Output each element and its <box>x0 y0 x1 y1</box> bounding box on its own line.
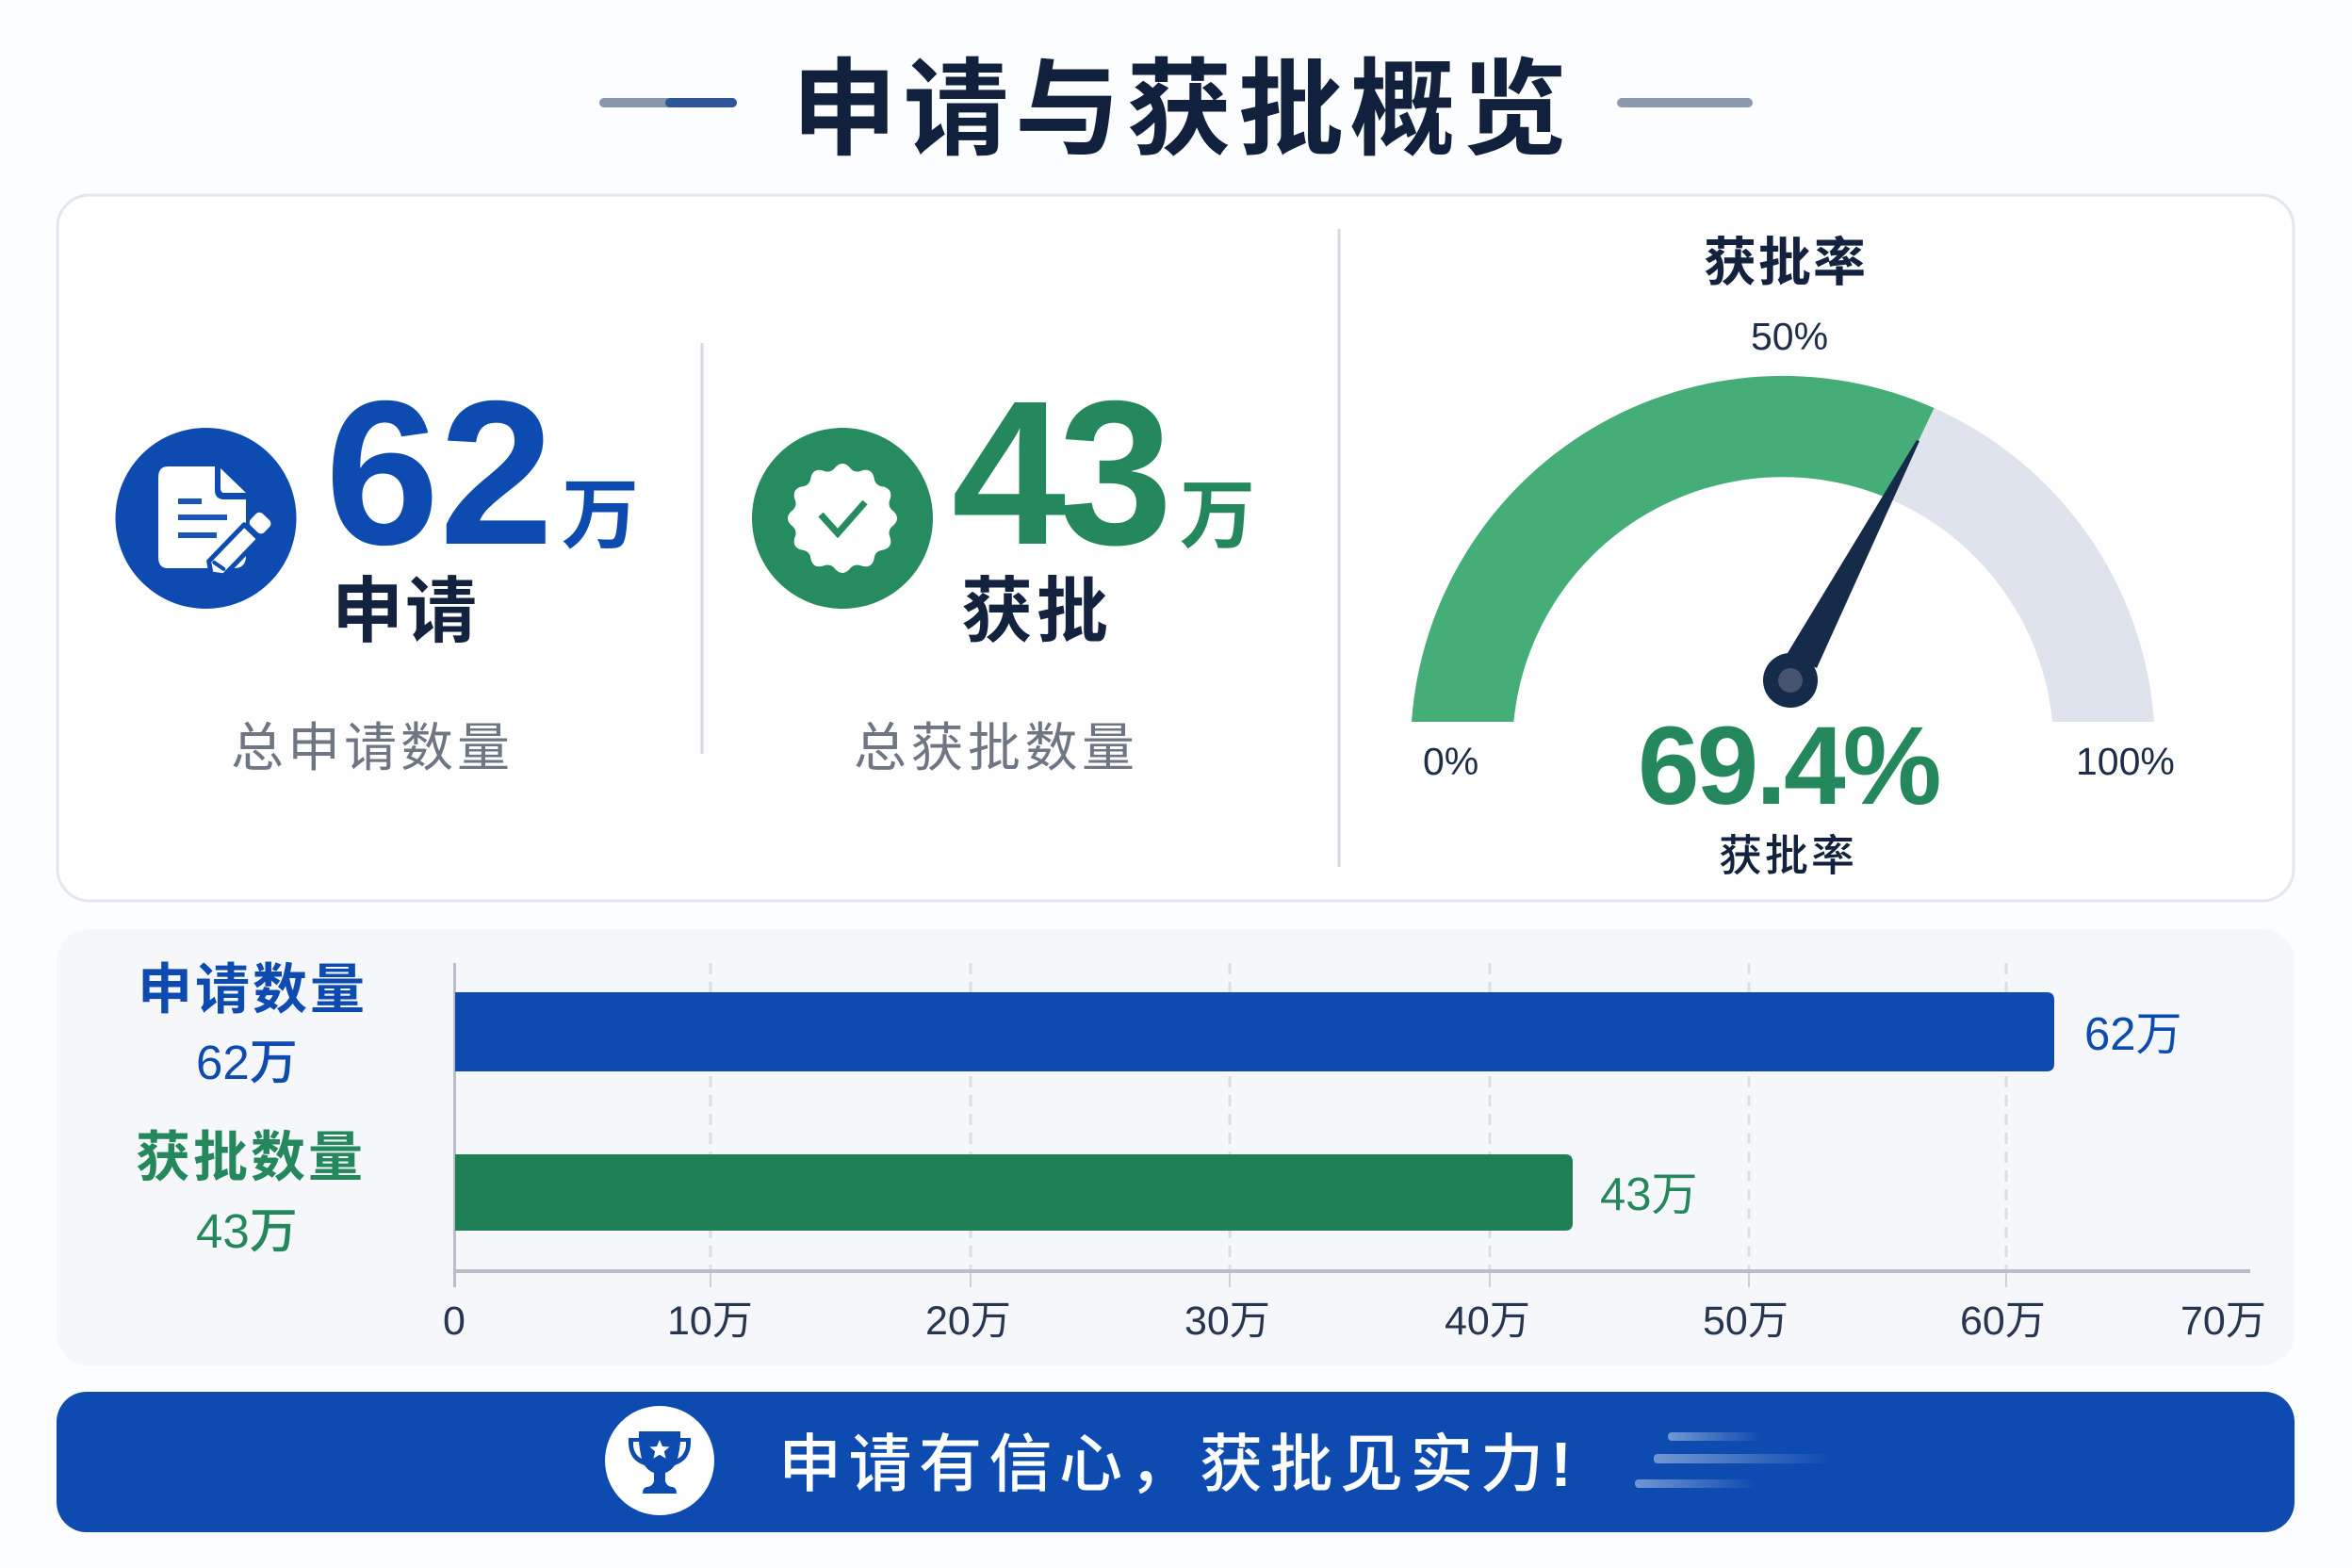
gauge value arc <box>1412 376 1934 722</box>
row label: 申请数量: 申请数量 <box>138 959 368 1021</box>
x axis labels <box>443 1298 2266 1344</box>
x axis labels: 40万 <box>1445 1298 1530 1344</box>
row label: 申请数量 <box>138 959 368 1089</box>
label: 申请: 申请 <box>332 572 479 652</box>
row label: 获批数量: 获批数量 <box>136 1127 366 1188</box>
row label: 获批数量 <box>136 1127 366 1258</box>
tick label 0%: 0% <box>1423 740 1478 783</box>
tick label 50%: 50% <box>1751 315 1828 358</box>
gauge chart <box>1412 315 2175 783</box>
title <box>599 51 1753 169</box>
stat: applications 62万: 万 <box>562 473 639 559</box>
tick label 100%: 100% <box>2076 740 2175 783</box>
caption: 总获批数量: 总获批数量 <box>854 718 1138 777</box>
bar: applications <box>455 992 2054 1071</box>
icon: trophy <box>605 1406 714 1515</box>
bar value: 43万: 43万 <box>1600 1169 1698 1220</box>
banner slogan: 申请有信心，获批见实力! <box>778 1429 1578 1500</box>
gauge needle <box>1763 440 1919 708</box>
speed lines <box>1635 1432 1833 1488</box>
stat: approvals 43万: 万 <box>1180 474 1255 558</box>
row label: 获批数量: 43万 <box>196 1204 298 1258</box>
label: 获批: 获批 <box>961 572 1112 652</box>
banner <box>57 1392 2295 1532</box>
heading: gauge: 获批率 <box>1704 233 1868 292</box>
x axis labels: 60万 <box>1960 1298 2046 1344</box>
gauge track <box>1890 408 2154 722</box>
caption: 总申请数量: 总申请数量 <box>231 718 514 777</box>
x axis labels: 10万 <box>667 1298 753 1344</box>
icon: approval badge <box>752 428 933 609</box>
chart axes <box>453 963 2250 1287</box>
stat: approvals 43万: 43 <box>952 359 1166 588</box>
panel: bar chart <box>57 929 2295 1365</box>
title rule: right <box>1617 98 1753 107</box>
x axis labels: 20万 <box>925 1298 1011 1344</box>
x axis labels: 50万 <box>1703 1298 1788 1344</box>
icon: document with pencil <box>115 428 296 609</box>
gauge value: 69.4% <box>1638 704 1939 828</box>
x axis labels: 0 <box>443 1298 466 1344</box>
stat: applications 62万: 62 <box>325 359 553 588</box>
panel: summary card <box>57 195 2294 901</box>
bar value: 62万: 62万 <box>2084 1009 2182 1060</box>
x axis labels: 70万 <box>2180 1298 2266 1344</box>
gauge caption: 获批率 <box>1719 831 1857 880</box>
title text: 申请与获批概览 <box>792 51 1574 169</box>
bar: approvals <box>455 1154 1573 1231</box>
title rule: left <box>599 98 737 107</box>
row label: 申请数量: 62万 <box>196 1036 298 1089</box>
x axis labels: 30万 <box>1184 1298 1270 1344</box>
chart grid <box>710 963 2006 1287</box>
